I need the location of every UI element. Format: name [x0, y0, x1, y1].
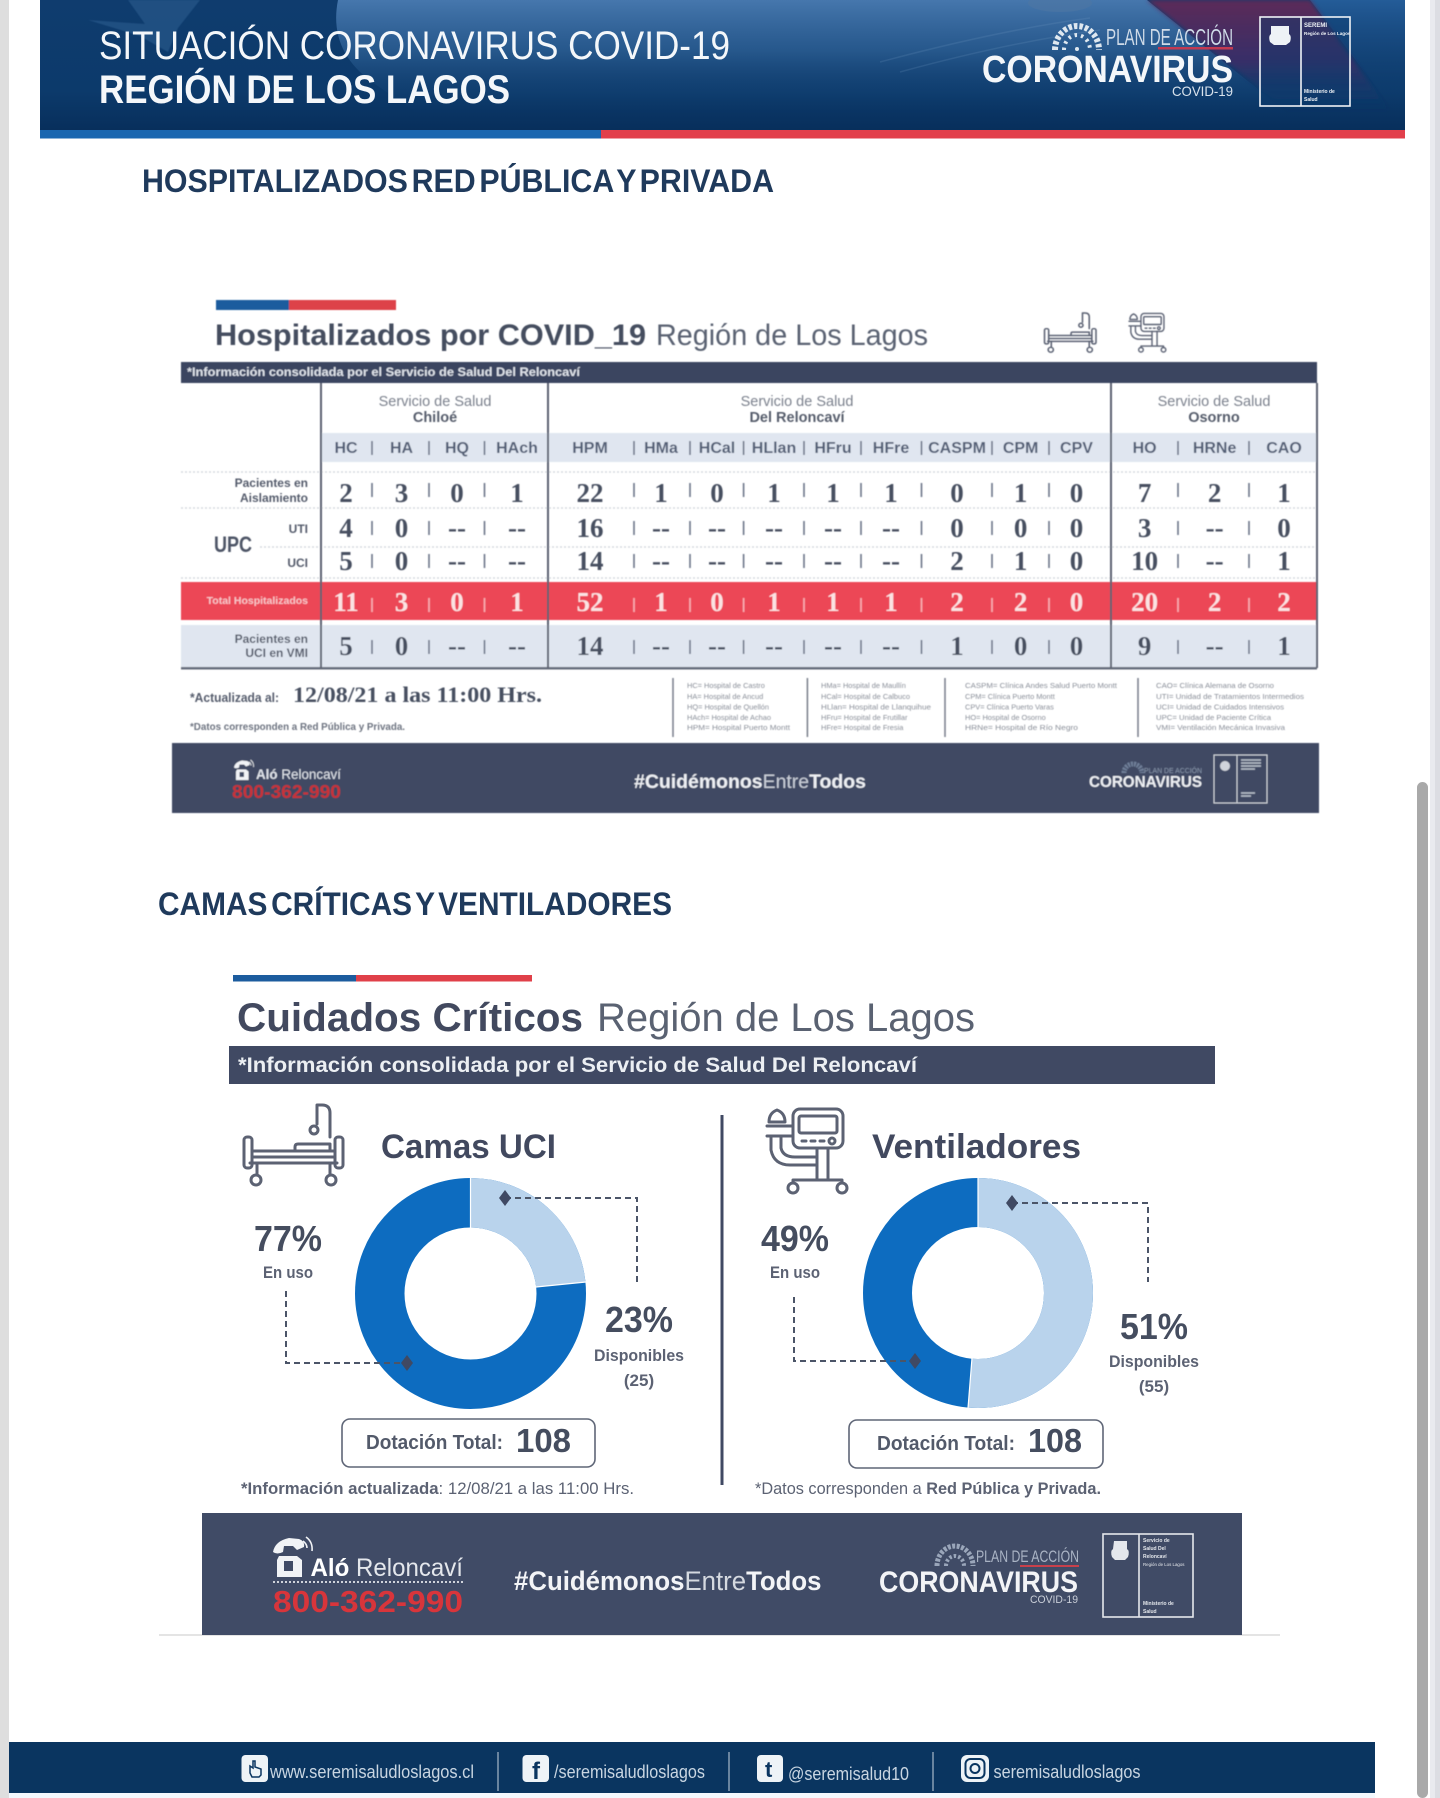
logo: servicio de salud box: Ministerio de [1143, 1601, 1174, 1607]
service headings: Del Reloncaví [749, 410, 846, 426]
hashtag: #CuidémonosEntreTodos [514, 1566, 822, 1596]
hotline: 800-362-990 [273, 1584, 463, 1619]
icon: phone [273, 1537, 312, 1577]
row: pacientes en aislamiento: 1 [654, 478, 668, 508]
row: pacientes en aislamiento: 1 [884, 478, 898, 508]
update note: *Datos corresponden a Red Pública y Privada. [190, 721, 405, 733]
callout: 77% en uso [254, 1218, 413, 1371]
row: pacientes en aislamiento: 0 [1070, 478, 1083, 508]
row: UTI: -- [508, 513, 526, 543]
row: pacientes en aislamiento: 22 [576, 478, 604, 508]
UPC label: UPC [214, 532, 252, 557]
logo: seremi box: Salud [1304, 97, 1318, 103]
row: UTI: 0 [1070, 513, 1083, 543]
service headings: Servicio de Salud [379, 394, 491, 410]
logo: seremi box [1260, 17, 1351, 106]
donut: camas uci [380, 1178, 586, 1384]
row: UCI: -- [448, 546, 466, 576]
logo: seremi box: Región de Los Lagos [1304, 31, 1351, 36]
footer strip: table: Aló Reloncaví [256, 766, 341, 782]
info bar [181, 362, 1317, 383]
legend of abbreviations: CPM= Clínica Puerto Montt [965, 692, 1055, 701]
row: UTI: 16 [576, 513, 604, 543]
service headings: Servicio de Salud [741, 394, 853, 410]
social: facebook: f [532, 1758, 541, 1785]
row: pacientes uci en vmi: 0 [1070, 631, 1083, 661]
legend of abbreviations: HPM= Hospital Puerto Montt [687, 723, 790, 732]
legend of abbreviations: CPV= Clínica Puerto Varas [965, 702, 1054, 712]
footer strip: cuidados críticos [159, 1513, 1280, 1636]
row: UTI: -- [882, 513, 900, 543]
logo: plan de acción coronavirus: CORONAVIRUS [879, 1566, 1078, 1599]
row: pacientes en aislamiento [235, 476, 1291, 508]
legend of abbreviations: HFru= Hospital de Frutillar [821, 713, 908, 722]
column headers: HQ [445, 440, 469, 457]
total box: camas [342, 1419, 595, 1467]
row: UCI: -- [1206, 546, 1224, 576]
row: pacientes en aislamiento: 2 [1208, 478, 1221, 508]
row: UCI [287, 546, 1291, 576]
legend of abbreviations: HO= Hospital de Osorno [965, 713, 1046, 722]
logo: seremi box: SEREMI [1304, 23, 1327, 29]
service headings [379, 394, 1270, 426]
row: pacientes en aislamiento: 7 [1138, 478, 1151, 508]
row: UCI: 1 [1014, 546, 1027, 576]
row: UTI: 0 [1014, 513, 1027, 543]
column headers: HMa [644, 440, 678, 457]
row: total hospitalizados: 52 [576, 587, 604, 617]
row: pacientes uci en vmi: -- [882, 631, 900, 661]
panel: hospitalizados table [172, 300, 1319, 813]
logo: servicio de salud box: Salud Del [1143, 1546, 1166, 1552]
callout: 51% disponibles: Disponibles [1109, 1352, 1199, 1371]
column headers: HA [390, 440, 414, 457]
title: SITUACIÓN CORONAVIRUS COVID-19 [99, 23, 730, 68]
column headers: HPM [572, 440, 608, 457]
total box: ventiladores: Dotación Total: [877, 1433, 1015, 1455]
row: UTI: 3 [1138, 513, 1151, 543]
social: facebook [522, 1755, 705, 1785]
row: pacientes uci en vmi: -- [508, 631, 526, 661]
row: pacientes uci en vmi: 1 [950, 631, 964, 661]
row: UCI: 0 [395, 546, 408, 576]
logo: servicio de salud box [1103, 1534, 1193, 1617]
icon: ventilator [767, 1109, 847, 1193]
column headers: CPV [1060, 440, 1093, 457]
total box: camas: 108 [516, 1422, 571, 1459]
row: pacientes en aislamiento: 1 [826, 478, 840, 508]
ventiladores heading: Ventiladores [872, 1128, 1081, 1166]
callout: 23% disponibles [499, 1190, 684, 1390]
social: tumblr: @seremisalud10 [788, 1764, 909, 1784]
legend of abbreviations: HFre= Hospital de Fresia [821, 723, 904, 732]
flag stripe [40, 130, 1405, 138]
column headers: HLlan [752, 440, 796, 457]
callout: 23% disponibles: (25) [624, 1371, 654, 1390]
colour bar [233, 975, 532, 982]
row: UTI: 0 [1277, 513, 1291, 543]
row: total hospitalizados: 0 [450, 587, 464, 617]
row: UCI: -- [652, 546, 670, 576]
info bar: *Información consolidada por el Servicio de Salud Del Reloncaví [238, 1054, 918, 1077]
footnote: ventiladores: *Datos corresponden a Red Pública y Privada. [755, 1479, 1101, 1498]
column headers: HO [1133, 440, 1157, 457]
panel title: Cuidados Críticos [237, 996, 583, 1040]
row: UCI: 0 [1070, 546, 1083, 576]
row: UTI: 0 [950, 513, 964, 543]
row: UTI: -- [448, 513, 466, 543]
row: pacientes en aislamiento: 1 [767, 478, 781, 508]
row: pacientes en aislamiento: 1 [1277, 478, 1291, 508]
logo: servicio de salud box: Región de Los Lagos [1143, 1562, 1185, 1567]
row: total hospitalizados: 1 [767, 587, 781, 617]
row: total hospitalizados: 0 [710, 587, 724, 617]
row: UTI: -- [765, 513, 783, 543]
column headers: HFre [873, 440, 909, 457]
icon: bed small [1045, 313, 1096, 352]
column headers [321, 433, 1317, 462]
row: pacientes en aislamiento: 0 [950, 478, 964, 508]
callout: 49% en uso: 49% [761, 1218, 829, 1259]
row: total hospitalizados: 2 [1208, 587, 1221, 617]
row: pacientes en aislamiento: 3 [395, 478, 408, 508]
callout: 49% en uso: En uso [770, 1263, 820, 1282]
service headings: Osorno [1188, 410, 1240, 426]
callout: 51% disponibles: 51% [1120, 1306, 1188, 1347]
table title: Región de Los Lagos [656, 319, 928, 352]
legend of abbreviations: CAO= Clínica Alemana de Osorno [1156, 681, 1274, 690]
row: total hospitalizados: Total Hospitalizados [207, 595, 308, 607]
row: pacientes en aislamiento: 2 [339, 478, 353, 508]
heading: hospitalizados: HOSPITALIZADOS RED PÚBLICA Y PRIVADA [142, 163, 774, 199]
legend of abbreviations: HA= Hospital de Ancud [687, 692, 763, 701]
column headers: HC [334, 440, 358, 457]
logo: plan de acción coronavirus: COVID-19 [1172, 83, 1233, 99]
row: total hospitalizados: 20 [1131, 587, 1158, 617]
panel title: Región de Los Lagos [597, 996, 975, 1040]
row: total hospitalizados: 2 [1277, 587, 1291, 617]
footer strip: table: CORONAVIRUS [1089, 774, 1202, 791]
social: facebook: /seremisaludloslagos [554, 1762, 705, 1782]
row: pacientes uci en vmi: 9 [1138, 631, 1151, 661]
update note: *Actualizada al: [190, 690, 279, 705]
row: pacientes uci en vmi: 5 [339, 631, 353, 661]
footer strip: table [172, 743, 1319, 813]
row: total hospitalizados: 2 [1014, 587, 1027, 617]
icon: ventilator small [1129, 313, 1166, 352]
row: UCI: 1 [1277, 546, 1291, 576]
info bar [229, 1046, 1215, 1084]
row: pacientes uci en vmi: -- [765, 631, 783, 661]
row: total hospitalizados: 11 [333, 587, 359, 617]
legend of abbreviations [673, 678, 1304, 737]
social: instagram: seremisaludloslagos [994, 1762, 1140, 1782]
social: web [242, 1755, 474, 1782]
footer strip: table: PLAN DE ACCIÓN [1144, 766, 1202, 775]
callout: 23% disponibles: 23% [605, 1299, 673, 1340]
social: web: www.seremisaludloslagos.cl [269, 1762, 474, 1782]
row: pacientes en aislamiento: 1 [1014, 478, 1027, 508]
info bar: *Información consolidada por el Servicio de Salud Del Reloncaví [187, 365, 581, 379]
row: UCI: -- [765, 546, 783, 576]
row: total hospitalizados: 1 [654, 587, 668, 617]
legend of abbreviations: HLlan= Hospital de Llanquihue [821, 702, 931, 712]
row: pacientes en aislamiento: Pacientes en [235, 476, 308, 490]
row: UCI: 10 [1131, 546, 1158, 576]
logo: plan de acción coronavirus: PLAN DE ACCIÓN [1106, 24, 1233, 50]
logo: plan de acción coronavirus: PLAN DE ACCIÓN [976, 1547, 1079, 1566]
total box: ventiladores [849, 1420, 1103, 1468]
legend of abbreviations: UPC= Unidad de Paciente Crítica [1156, 713, 1272, 722]
column headers: CASPM [928, 440, 986, 457]
legend of abbreviations: HAch= Hospital de Achao [687, 713, 771, 722]
legend of abbreviations: HC= Hospital de Castro [687, 681, 765, 690]
footer strip: table: #CuidémonosEntreTodos [634, 772, 866, 793]
row: UCI: -- [824, 546, 842, 576]
row: pacientes uci en vmi: 0 [395, 631, 408, 661]
row: UCI: 2 [950, 546, 964, 576]
title: REGIÓN DE LOS LAGOS [99, 66, 510, 112]
social: tumblr [757, 1755, 909, 1784]
table title [215, 319, 928, 352]
row: UTI: 0 [395, 513, 408, 543]
row: UTI: 4 [339, 513, 353, 543]
legend of abbreviations: HRNe= Hospital de Río Negro [965, 723, 1078, 732]
row: pacientes en aislamiento: 0 [710, 478, 724, 508]
row: UCI: 14 [576, 546, 604, 576]
callout: 51% disponibles: (55) [1139, 1377, 1169, 1396]
column headers: HFru [814, 440, 852, 457]
callout: 77% en uso: En uso [263, 1263, 313, 1282]
row: UTI: UTI [289, 522, 308, 536]
legend of abbreviations: VMI= Ventilación Mecánica Invasiva [1156, 723, 1286, 732]
update note: 12/08/21 a las 11:00 Hrs. [293, 682, 542, 707]
row: pacientes uci en vmi: -- [448, 631, 466, 661]
legend of abbreviations: UTI= Unidad de Tratamientos Intermedios [1156, 692, 1304, 701]
panel: cuidados críticos [159, 975, 1280, 1636]
column headers: HAch [496, 440, 538, 457]
legend of abbreviations: HCal= Hospital de Calbuco [821, 692, 910, 701]
camas uci heading: Camas UCI [381, 1128, 556, 1166]
row: pacientes en aislamiento: Aislamiento [240, 491, 308, 505]
legend of abbreviations: HQ= Hospital de Quellón [687, 702, 769, 712]
row: pacientes uci en vmi: -- [708, 631, 726, 661]
logo: servicio de salud box: Salud [1143, 1609, 1157, 1615]
logo: plan de acción coronavirus [982, 24, 1233, 99]
panel title [237, 996, 975, 1040]
column headers: CAO [1266, 440, 1302, 457]
legend of abbreviations: HMa= Hospital de Maullín [821, 681, 906, 690]
row: pacientes uci en vmi: -- [1206, 631, 1224, 661]
row: total hospitalizados: 1 [826, 587, 840, 617]
scrollbar [1417, 782, 1428, 1798]
row: pacientes uci en vmi: 0 [1014, 631, 1027, 661]
row: pacientes uci en vmi: -- [652, 631, 670, 661]
row: total hospitalizados: 1 [884, 587, 898, 617]
row: total hospitalizados: 2 [950, 587, 964, 617]
heading: camas críticas: CAMAS CRÍTICAS Y VENTILADORES [158, 886, 672, 922]
row: pacientes uci en vmi: 14 [576, 631, 604, 661]
row: pacientes uci en vmi: Pacientes en [235, 632, 308, 646]
callout: 77% en uso: 77% [254, 1218, 322, 1259]
callout: 51% disponibles [1006, 1195, 1199, 1396]
logo: servicio de salud box: Servicio de [1143, 1538, 1170, 1544]
total box: ventiladores: 108 [1028, 1422, 1082, 1459]
row: UTI: -- [652, 513, 670, 543]
row: pacientes uci en vmi: 1 [1277, 631, 1291, 661]
hotline: Aló Reloncaví [310, 1554, 463, 1582]
vertical rules [321, 383, 1317, 668]
panel: header banner [40, 0, 1405, 138]
colour bar [216, 300, 396, 310]
panel: social footer [9, 1742, 1375, 1798]
column headers: CPM [1003, 440, 1038, 457]
row: UCI: UCI [287, 556, 308, 570]
logo: plan de acción coronavirus [879, 1546, 1079, 1606]
column headers: HCal [699, 440, 735, 457]
icon: bed [244, 1105, 343, 1185]
legend of abbreviations: CASPM= Clínica Andes Salud Puerto Montt [965, 681, 1117, 690]
row: UCI: -- [882, 546, 900, 576]
social: tumblr: t [765, 1757, 773, 1782]
footnote: camas: *Información actualizada: 12/08/21 a las 11:00 Hrs. [241, 1479, 634, 1498]
row: pacientes uci en vmi: UCI en VMI [245, 646, 308, 660]
divider [720, 1115, 724, 1485]
row: UCI: 5 [339, 546, 353, 576]
footer strip: table: 800-362-990 [232, 782, 341, 802]
row: UTI: -- [824, 513, 842, 543]
legend of abbreviations: UCI= Unidad de Cuidados Intensivos [1156, 702, 1284, 712]
row: UCI: -- [508, 546, 526, 576]
row: total hospitalizados: 1 [510, 587, 524, 617]
callout: 49% en uso [761, 1218, 921, 1369]
row: total hospitalizados: 0 [1070, 587, 1083, 617]
column headers: HRNe [1193, 440, 1236, 457]
logo: servicio de salud box: Reloncaví [1143, 1554, 1167, 1560]
logo: plan de acción coronavirus: CORONAVIRUS [982, 49, 1233, 91]
row: pacientes uci en vmi: -- [824, 631, 842, 661]
title [99, 23, 730, 112]
row: UCI: -- [708, 546, 726, 576]
row: UTI: -- [708, 513, 726, 543]
row: pacientes uci en vmi [181, 625, 1317, 670]
hotline [273, 1554, 463, 1619]
table title: Hospitalizados por COVID_19 [215, 319, 646, 352]
logo: plan de acción coronavirus: COVID-19 [1030, 1594, 1078, 1606]
service headings: Chiloé [413, 410, 457, 426]
logo: seremi box: Ministerio de [1304, 89, 1335, 95]
row: pacientes en aislamiento: 1 [510, 478, 524, 508]
row: UTI [289, 513, 1291, 543]
row: UTI: -- [1206, 513, 1224, 543]
row: total hospitalizados: 3 [395, 587, 408, 617]
social: instagram [961, 1755, 1140, 1782]
row: pacientes en aislamiento: 0 [450, 478, 464, 508]
donut: ventiladores [888, 1178, 1068, 1408]
row: total hospitalizados [181, 582, 1317, 620]
total box: camas: Dotación Total: [366, 1432, 503, 1454]
callout: 23% disponibles: Disponibles [594, 1346, 684, 1365]
service headings: Servicio de Salud [1158, 394, 1270, 410]
update note [190, 682, 542, 733]
